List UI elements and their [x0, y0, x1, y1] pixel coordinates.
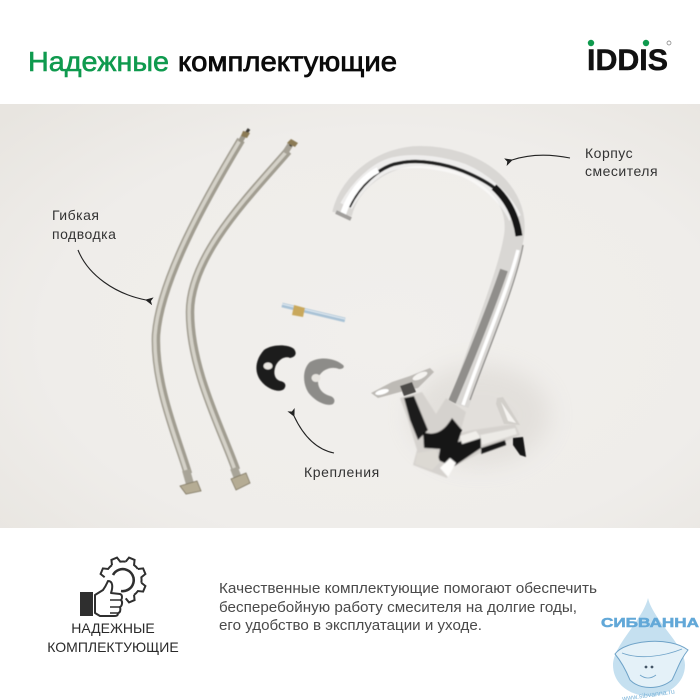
label: flexible hose: Гибкая — [52, 207, 99, 223]
photo: grey washer — [304, 358, 344, 405]
hose fittings top — [240, 132, 246, 142]
logo: IDDIS: IDDIS — [587, 44, 668, 77]
faucet left handle — [371, 368, 434, 398]
gear — [100, 555, 148, 603]
faucet right handle — [496, 397, 526, 457]
label: flexible hose: подводка — [52, 226, 116, 242]
description text: Качественные комплектующие помогают обеспечить — [219, 581, 597, 597]
title: комплектующие — [178, 46, 397, 77]
watermark: Sibvanna logo — [601, 598, 700, 700]
description text: его удобство в эксплуатации и уходе. — [219, 618, 482, 634]
icon caption: НАДЕЖНЫЕ — [71, 620, 155, 636]
icon: thumb up with gear — [80, 555, 148, 616]
faucet spout — [336, 156, 523, 405]
photo: threaded stud — [282, 304, 345, 320]
hose fittings bottom — [186, 470, 190, 484]
photo panel — [0, 104, 700, 528]
label: fasteners: Крепления — [304, 464, 380, 480]
watermark: Sibvanna logo: СИБВАННА — [601, 615, 700, 630]
photo: flexible hoses — [155, 129, 298, 494]
arrow: flexible hose — [78, 250, 146, 300]
title: Надежные — [28, 46, 169, 77]
photo: faucet — [336, 156, 550, 478]
hand — [80, 592, 93, 616]
arrow: faucet body — [512, 155, 570, 160]
faucet body — [400, 392, 520, 478]
title — [28, 46, 397, 77]
arrow: fasteners — [294, 416, 334, 453]
faucet shadow — [410, 365, 550, 465]
label: faucet body: Корпус — [585, 145, 633, 161]
photo: black washer — [256, 345, 296, 391]
description text: бесперебойную работу смесителя на долгие годы, — [219, 600, 577, 616]
label: faucet body: смесителя — [585, 163, 658, 179]
icon caption: КОМПЛЕКТУЮЩИЕ — [47, 639, 179, 655]
